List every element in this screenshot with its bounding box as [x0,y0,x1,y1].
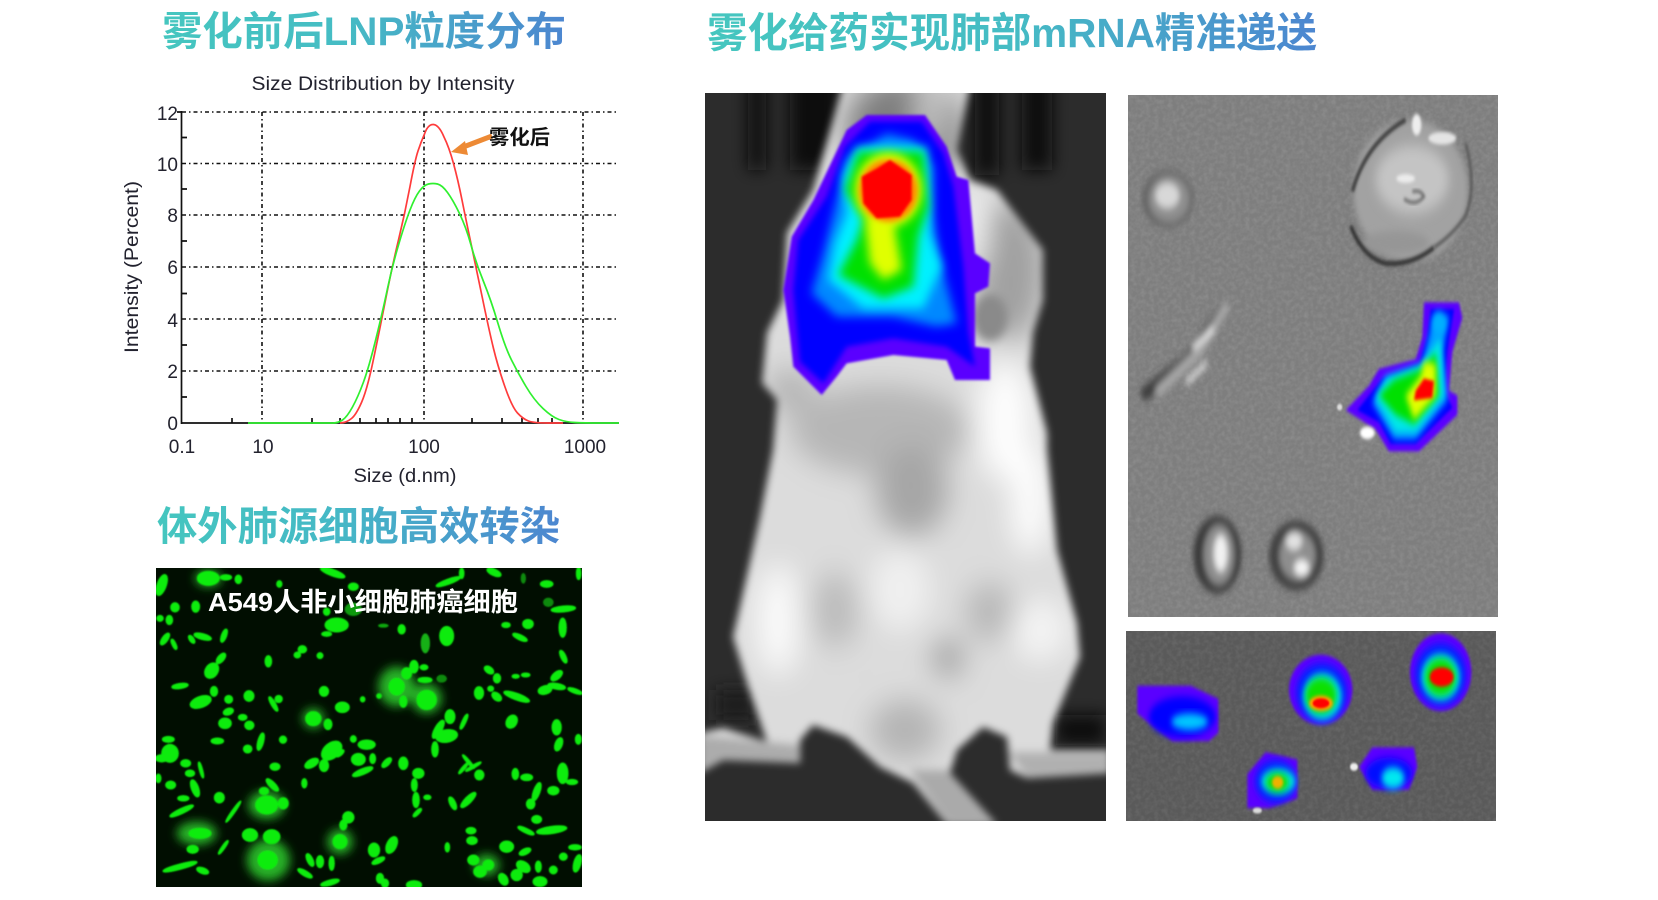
lobe 2 [1289,655,1352,725]
panel: whole-body bioluminescence of mouse [700,70,1110,825]
lobe 5 [1350,747,1417,790]
y-axis tick labels: 6 [167,258,178,279]
organ: liver and heart top right [1351,114,1471,264]
heading: LNP size distribution: 雾化前后LNP粒度分布 [162,10,566,54]
chart title: Size Distribution by Intensity [252,74,515,95]
arrow: points to after-nebulization curve [451,136,492,155]
background texture [1126,631,1496,821]
x-axis tick labels: 100 [408,437,440,458]
cell line label: A549人非小细胞肺癌细胞 [208,587,518,617]
heat map signal on lung [1337,302,1462,451]
y-axis tick labels: 4 [167,311,178,332]
panel: ex vivo lung lobes [1126,631,1496,821]
chart axes [177,111,619,424]
y-axis tick labels [157,104,178,435]
background texture [1128,95,1498,617]
red curve: after nebulization [340,124,563,423]
organ: elongated tissue left [1146,308,1226,393]
organs [1143,114,1471,594]
panel: fluorescence micrograph of A549 cells [154,566,583,889]
red peak [862,160,912,218]
x-axis tick labels [169,437,606,458]
dark background bands [716,70,1106,745]
y-axis tick labels: 8 [167,206,178,227]
transfected green cells [154,566,583,889]
y-axis tick labels: 12 [157,104,178,125]
green curve: before nebulization [248,184,619,423]
lobe 4 [1247,752,1297,813]
x-axis title: Size (d.nm) [354,466,456,487]
organ: spleen-like top left [1143,171,1193,227]
fur shading [700,70,1110,825]
yellow contour [855,153,922,280]
panel: ex vivo organs [1128,95,1498,617]
x-axis tick labels: 0.1 [169,437,195,458]
heading: in vitro lung cell transfection: 体外肺源细胞高效转染 [157,505,560,549]
light blue contour [812,133,957,327]
heading: nebulized mRNA delivery to lung: 雾化给药实现肺部mRNA精准递送 [707,10,1317,56]
chart grid [182,112,619,423]
y-axis tick labels: 2 [167,362,178,383]
orange rim [859,159,918,222]
organs: two kidneys [1193,516,1324,594]
lobe 1 [1137,686,1218,741]
x-axis tick labels: 1000 [564,437,606,458]
green contour [838,152,928,298]
x-axis tick labels: 10 [252,437,274,458]
lobe signals [1137,633,1471,813]
chart: size distribution by intensity [122,74,619,487]
mouse body silhouette [700,70,1110,825]
y-axis tick labels: 0 [167,414,178,435]
annotation: after nebulization: 雾化后 [489,126,550,149]
y-axis tick labels: 10 [157,155,178,176]
purple outer contour [783,115,990,395]
y-axis title: Intensity (Percent) [122,181,143,353]
blue contour [793,122,975,383]
lobe 3 [1410,633,1471,711]
cyan contour [828,147,942,308]
heat map signal over lung [783,115,990,395]
